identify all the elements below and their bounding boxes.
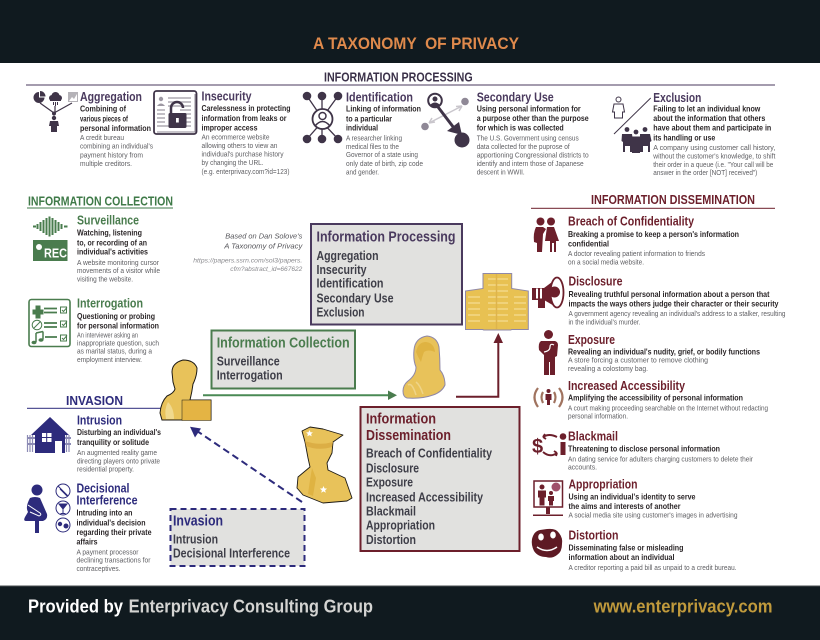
disclosure text: A government agency revealing an individual's address to a stalker, resulting xyxy=(568,311,786,318)
increased accessibility text: personal information. xyxy=(568,414,628,421)
intrusion text: Disturbing an individual's xyxy=(77,427,161,437)
insecurity text xyxy=(202,89,290,176)
identification text: A researcher linking xyxy=(346,136,402,142)
intrusion text: An augmented reality game xyxy=(77,450,157,457)
decisional interference text: Decisional xyxy=(76,481,130,496)
icon: exposure xyxy=(539,330,558,375)
exclusion text: without the customer's knowledge, to shift xyxy=(652,154,775,161)
disclosure text: impacts the ways others judge their character or their security xyxy=(568,298,779,308)
exclusion text: Failing to let an individual know xyxy=(653,104,761,114)
blackmail text: Threatening to disclose personal information xyxy=(568,444,720,454)
surveillance text: to, or recording of an xyxy=(77,237,147,247)
distortion text: Distortion xyxy=(568,528,619,543)
increased accessibility text: Increased Accessibility xyxy=(568,378,686,393)
heading: information dissemination: INFORMATION DISSEMINATION xyxy=(591,193,755,207)
box: information processing xyxy=(311,224,462,324)
box: information collection xyxy=(212,330,355,388)
breach text: Breaking a promise to keep a person's information xyxy=(568,229,739,239)
box: information dissemination: Dissemination xyxy=(366,428,451,444)
panel: information processing xyxy=(26,71,775,177)
icon: breach of confidentiality xyxy=(534,218,559,252)
box: information dissemination: Increased Accessibility xyxy=(366,491,483,505)
icon: insecurity xyxy=(154,91,196,134)
disclosure text: Revealing truthful personal information about a person that xyxy=(568,289,770,299)
box: information processing: Information Processing xyxy=(316,230,456,246)
attribution note xyxy=(193,231,304,273)
footer band: Provided by xyxy=(28,596,123,616)
interrogation text: Interrogation xyxy=(77,296,143,311)
box: information dissemination: Distortion xyxy=(366,533,416,547)
decisional interference text: individual's decision xyxy=(76,518,146,528)
surveillance text xyxy=(77,213,160,283)
identification text: only date of birth, zip code xyxy=(346,161,423,168)
exclusion text: about the information that others xyxy=(653,113,766,123)
aggregation text: payment history from xyxy=(80,152,143,160)
aggregation text: A credit bureau xyxy=(80,135,124,142)
box: information processing: Insecurity xyxy=(316,263,367,277)
surveillance text: visiting the website. xyxy=(77,276,133,283)
surveillance text: movements of a visitor while xyxy=(77,268,160,275)
decisional interference text: regarding their private xyxy=(76,527,152,537)
exclusion text: Exclusion xyxy=(653,90,701,105)
secondary use text: Secondary Use xyxy=(477,90,554,105)
identification text: Identification xyxy=(346,90,413,105)
icon: blackmail: $ xyxy=(532,436,543,458)
exclusion text xyxy=(652,90,775,177)
footer band: www.enterprivacy.com xyxy=(593,596,772,616)
identification text: individual xyxy=(346,123,378,133)
secondary use text: The U.S. Government using census xyxy=(477,136,579,142)
secondary use text: descent in WWII. xyxy=(477,170,525,176)
aggregation text: personal information xyxy=(80,123,151,133)
icon: identification xyxy=(303,92,342,143)
icon: interrogation xyxy=(29,300,70,346)
increased accessibility text xyxy=(568,378,768,421)
insecurity text: (e.g. enterprivacy.com?id=123) xyxy=(202,169,290,176)
exposure text: Revealing an individual's nudity, grief, or bodily functions xyxy=(568,347,760,357)
insecurity text: information from leaks or xyxy=(202,113,287,123)
exclusion text: answer in the order [NOT] received") xyxy=(653,170,757,177)
arrow: invasion xyxy=(190,427,302,502)
icon: megaphone xyxy=(532,278,564,308)
header band with title: A TAXONOMY OF PRIVACY xyxy=(313,35,519,53)
illustration: data holder person xyxy=(403,336,445,398)
decisional interference text: Intruding into an xyxy=(76,508,132,518)
arrow: processing xyxy=(456,333,503,397)
surveillance text: Surveillance xyxy=(77,213,139,228)
exposure text xyxy=(568,332,760,373)
attribution note: Based on Dan Solove's xyxy=(225,231,303,240)
decisional interference text: A payment processor xyxy=(76,549,139,556)
surveillance text: A website monitoring cursor xyxy=(77,260,160,267)
icon: exclusion xyxy=(612,97,652,153)
intrusion text: directing players onto private xyxy=(77,458,160,465)
box: information collection: Interrogation xyxy=(217,368,283,382)
icon: house xyxy=(27,417,71,453)
box: information collection: Surveillance xyxy=(217,355,280,369)
aggregation text xyxy=(80,89,154,168)
illustration: data subject xyxy=(160,360,211,420)
box: invasion: Intrusion xyxy=(173,532,218,546)
attribution note: A Taxonomy of Privacy xyxy=(223,241,304,250)
box: information processing: Identification xyxy=(316,277,384,291)
footer band xyxy=(0,586,820,640)
interrogation text: Questioning or probing xyxy=(77,311,155,321)
disclosure text xyxy=(568,274,786,326)
illustration: officer xyxy=(297,427,352,503)
box: information dissemination: Information xyxy=(366,411,436,427)
intrusion text: Intrusion xyxy=(77,412,122,427)
insecurity text: Insecurity xyxy=(202,89,252,104)
box: information dissemination: Disclosure xyxy=(366,461,419,475)
insecurity text: improper access xyxy=(202,123,258,133)
appropriation text: the aims and interests of another xyxy=(568,501,681,511)
icon: decisional interference xyxy=(24,484,70,533)
identification text: and gender. xyxy=(346,170,379,176)
exposure text: Exposure xyxy=(568,332,615,347)
exposure text: A store forcing a customer to remove clothing xyxy=(568,358,708,365)
aggregation text: multiple creditors. xyxy=(80,161,132,168)
secondary use text xyxy=(477,90,589,176)
increased accessibility text: A court making proceeding searchable on the Internet without redacting xyxy=(568,405,768,412)
icon: aggregation xyxy=(34,91,78,132)
box: information processing: Secondary Use xyxy=(316,292,394,306)
header band with title xyxy=(0,0,820,63)
identification text xyxy=(346,90,423,176)
identification text: Linking of information xyxy=(346,104,421,114)
interrogation text xyxy=(77,296,159,364)
appropriation text: Using an individual's identity to serve xyxy=(568,492,696,502)
heading: invasion: INVASION xyxy=(66,394,123,408)
secondary use text: apportioning Congressional districts to xyxy=(477,152,589,160)
appropriation text: Appropriation xyxy=(568,477,638,492)
heading: invasion xyxy=(27,394,167,409)
box: invasion: Invasion xyxy=(173,514,223,530)
interrogation text: employment interview. xyxy=(77,357,142,364)
blackmail text: Blackmail xyxy=(568,429,618,444)
secondary use text: Using personal information for xyxy=(477,104,581,114)
icon: blackmail xyxy=(532,433,566,458)
secondary use text: identify and intern those of Japanese xyxy=(477,161,584,168)
box: information dissemination: Appropriation xyxy=(366,518,435,532)
distortion text: information about an individual xyxy=(568,552,674,562)
increased accessibility text: Amplifying the accessibility of personal information xyxy=(568,393,743,403)
exclusion text: their order in a queue (i.e. "Your call will be xyxy=(653,162,773,169)
attribution note: cfm?abstract_id=667622 xyxy=(230,266,303,273)
distortion text: A creditor reporting a paid bill as unpaid to a credit bureau. xyxy=(568,565,737,572)
exclusion text: have about them and participate in xyxy=(653,123,771,133)
exposure text: revealing a colostomy bag. xyxy=(568,366,648,373)
surveillance text: Watching, listening xyxy=(77,228,142,238)
insecurity text: Carelessness in protecting xyxy=(202,103,290,113)
box: invasion: Decisional Interference xyxy=(173,547,290,561)
blackmail text: accounts. xyxy=(568,465,597,472)
panel: information collection xyxy=(27,194,173,364)
decisional interference text: affairs xyxy=(76,536,98,546)
insecurity text: by changing the URL. xyxy=(202,160,264,167)
aggregation text: Aggregation xyxy=(80,89,142,104)
identification text: to a particular xyxy=(346,114,393,124)
arrow: collection xyxy=(203,390,397,400)
box: information processing: Exclusion xyxy=(316,306,364,320)
illustration: building xyxy=(465,274,528,330)
exclusion text: A company using customer call history, xyxy=(653,145,775,152)
interrogation text: as marital status, during a xyxy=(77,348,152,355)
blackmail text: An dating service for adulters charging customers to delete their xyxy=(568,456,754,463)
intrusion text: tranquility or solitude xyxy=(77,437,149,447)
intrusion text: residential property. xyxy=(77,467,134,474)
box: information dissemination: Blackmail xyxy=(366,505,416,519)
icon: surveillance xyxy=(33,216,68,261)
decisional interference text: contraceptives. xyxy=(76,566,121,573)
footer band: Enterprivacy Consulting Group xyxy=(129,596,373,616)
icon: distortion xyxy=(532,529,562,558)
breach text: confidential xyxy=(568,238,609,248)
insecurity text: An ecommerce website xyxy=(202,134,270,141)
aggregation text: Combining of xyxy=(80,104,126,114)
decisional interference text: Interference xyxy=(76,492,138,507)
secondary use text: for which is was collected xyxy=(477,123,564,133)
aggregation text: combining an individual's xyxy=(80,144,154,150)
decisional interference text: declining transactions for xyxy=(76,558,151,565)
blackmail text xyxy=(568,429,754,472)
breach text: on a social media website. xyxy=(568,260,644,267)
breach text: Breach of Confidentiality xyxy=(568,214,695,229)
breach text: A doctor revealing patient information to friends xyxy=(568,251,706,258)
disclosure text: in the individual's murder. xyxy=(568,319,641,326)
decisional interference text xyxy=(76,481,152,573)
intrusion text xyxy=(77,412,161,474)
surveillance text: individual's activities xyxy=(77,247,148,257)
insecurity text: individual's purchase history xyxy=(202,152,284,158)
appropriation text: A social media site using customer's images in advertising xyxy=(568,513,738,520)
secondary use text: data collected for the puprose of xyxy=(477,144,570,151)
box: invasion xyxy=(170,509,304,566)
panel: information dissemination xyxy=(531,193,786,572)
heading: information collection: INFORMATION COLLECTION xyxy=(28,194,173,208)
icon: secondary use xyxy=(421,94,470,148)
exclusion text: its handling or use xyxy=(653,132,716,142)
box: information dissemination: Breach of Confidentiality xyxy=(366,446,492,460)
interrogation text: inappropriate question, such xyxy=(77,341,159,348)
appropriation text xyxy=(568,477,738,520)
distortion text xyxy=(568,528,737,572)
box: information processing: Aggregation xyxy=(316,249,378,263)
aggregation text: various pieces of xyxy=(80,114,128,124)
interrogation text: for personal information xyxy=(77,320,159,330)
identification text: medical files to the xyxy=(346,144,399,151)
breach text xyxy=(568,214,739,267)
secondary use text: a purpose other than the purpose xyxy=(477,113,589,123)
heading: information processing: INFORMATION PROCESSING xyxy=(324,71,473,85)
distortion text: Disseminating false or misleading xyxy=(568,543,684,553)
disclosure text: Disclosure xyxy=(568,274,622,289)
icon: appropriation xyxy=(533,481,563,516)
icon: increased accessibility xyxy=(534,388,562,407)
box: information collection: Information Collection xyxy=(217,335,350,351)
interrogation text: An interviewer asking an xyxy=(77,332,138,339)
box: information dissemination xyxy=(360,407,520,551)
box: information dissemination: Exposure xyxy=(366,476,413,490)
icon: surveillance: REC xyxy=(44,246,68,260)
attribution note: https://papers.ssrn.com/sol3/papers. xyxy=(193,257,302,264)
panel: invasion xyxy=(24,394,167,573)
insecurity text: allowing others to view an xyxy=(202,143,278,150)
identification text: Governor of a state using xyxy=(346,152,418,159)
